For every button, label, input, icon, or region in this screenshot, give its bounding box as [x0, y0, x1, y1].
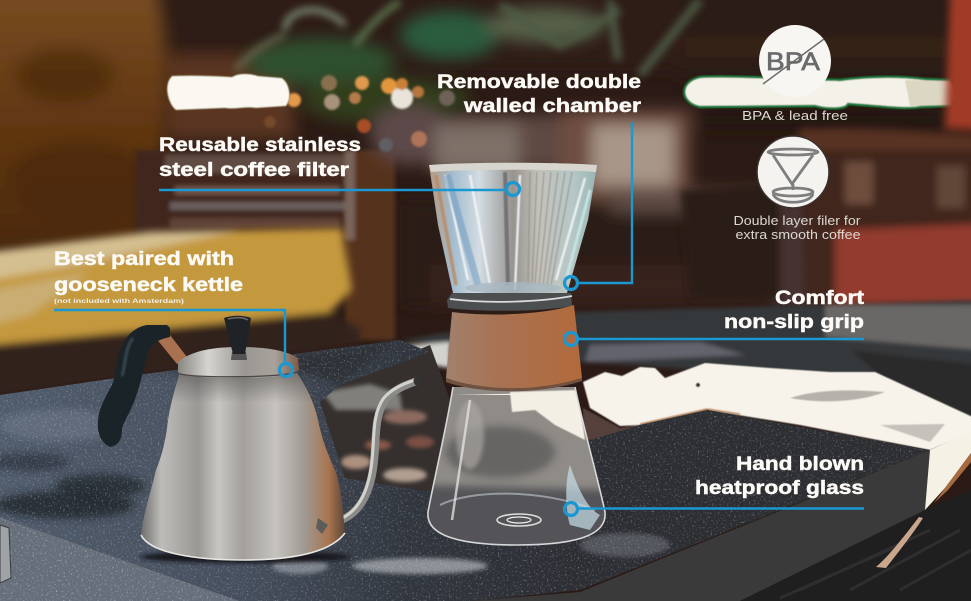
- kettle: [98, 316, 420, 563]
- silicone grip sleeve: [446, 305, 582, 388]
- label: hand blown glass: Hand blown: [736, 453, 864, 475]
- label: hand blown glass: [564, 453, 864, 516]
- kettle lid: [178, 347, 299, 378]
- caption: double layer filter: [734, 213, 861, 242]
- label: comfort grip: Comfort: [775, 287, 865, 309]
- kettle knob: [224, 316, 251, 354]
- leader line: [564, 502, 864, 516]
- kettle handle: [98, 325, 170, 447]
- leader line: [159, 182, 520, 196]
- label: gooseneck kettle: [54, 248, 292, 376]
- background: potted plant with bokeh: [235, 0, 700, 170]
- icon: BPA free: [759, 25, 831, 97]
- label: reusable filter: [159, 134, 520, 196]
- caption: BPA and lead free: BPA & lead free: [742, 108, 848, 123]
- lower carafe: [428, 387, 605, 545]
- caption: double layer filter: extra smooth coffee: [736, 227, 860, 242]
- background: blown-out highlight left: [167, 74, 289, 110]
- icon: double layer filter: [757, 136, 829, 208]
- label: removable double walled chamber: Removable double: [437, 71, 641, 93]
- background: grey back table: [390, 300, 971, 450]
- background: sunlit pit: [583, 363, 971, 450]
- background: red chair on the right: [680, 0, 971, 310]
- background: gravel pit: [310, 345, 450, 500]
- table: right stone side face and wicker base: [470, 432, 971, 601]
- table: left stone side face: [0, 517, 240, 601]
- label: reusable filter: steel coffee filter: [159, 159, 349, 181]
- table: stone top: [0, 330, 971, 601]
- icon: BPA free: BPA: [766, 48, 820, 76]
- upper cone: [429, 165, 597, 293]
- label: gooseneck kettle: gooseneck kettle: [54, 274, 243, 296]
- label: comfort grip: [564, 287, 865, 346]
- kettle rear handle bracket: [155, 335, 187, 364]
- glass dripper and carafe: [420, 163, 610, 550]
- leader line: [54, 310, 292, 376]
- background: orange leather chair: [0, 0, 168, 255]
- leader line: [564, 122, 632, 290]
- background: wicker seat and post: [135, 150, 395, 340]
- collar: [447, 293, 572, 311]
- kettle spout: [318, 381, 417, 523]
- kettle shadow: [140, 551, 350, 563]
- label: removable double walled chamber: walled chamber: [463, 95, 641, 117]
- kettle body: [141, 373, 345, 560]
- label: comfort grip: non-slip grip: [724, 311, 864, 333]
- background: blown-out highlight right: [684, 76, 955, 108]
- label: reusable filter: Reusable stainless: [159, 134, 361, 156]
- label: gooseneck kettle: (not included with Amsterdam): [54, 298, 184, 305]
- background: yellow cushion: [0, 228, 360, 398]
- label: gooseneck kettle: Best paired with: [54, 248, 234, 270]
- label: removable double walled chamber: [437, 71, 641, 290]
- caption: double layer filter: Double layer filer for: [734, 213, 861, 228]
- label: hand blown glass: heatproof glass: [695, 477, 864, 499]
- leader line: [564, 332, 864, 346]
